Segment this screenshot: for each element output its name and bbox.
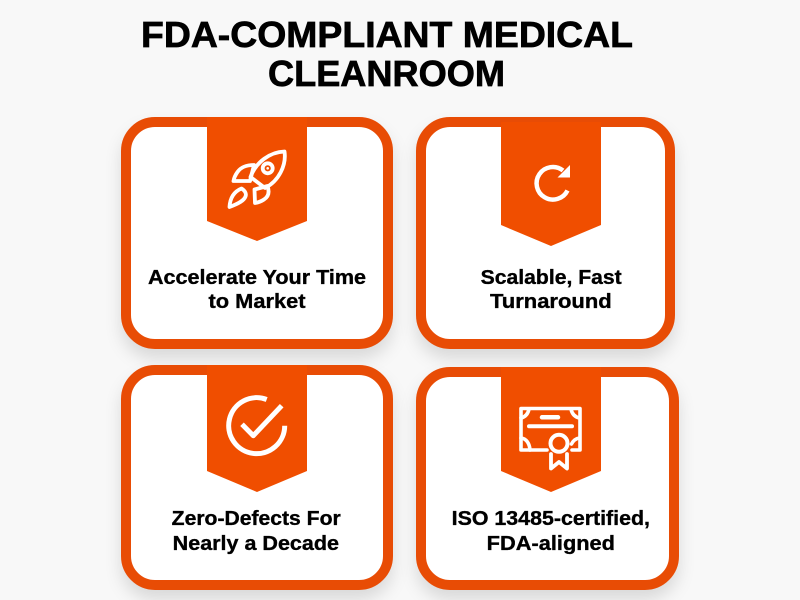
label [148,267,366,313]
ribbon banner [207,117,307,241]
title: FDA-COMPLIANT MEDICAL [141,14,633,55]
label [452,508,650,555]
ribbon banner [501,122,601,246]
panel: iso certified [421,367,674,585]
label: FDA-aligned [487,533,615,555]
label: ISO 13485-certified, [452,508,650,530]
panel: accelerate time to market [126,117,388,344]
label: to Market [208,291,306,313]
icon: refresh arrow [537,165,570,200]
card frame [421,372,674,585]
icon: check in circle [229,398,285,454]
icon: rocket [230,152,285,207]
label: Turnaround [490,291,612,313]
panel: scalable fast turnaround [421,122,670,344]
label: Scalable, Fast [481,267,622,289]
title: CLEANROOM [268,53,505,94]
ribbon banner [207,365,307,492]
label: Nearly a Decade [173,533,339,555]
card frame [126,370,388,585]
card frame [421,122,670,344]
card frame [126,122,388,344]
label: Accelerate Your Time [148,267,366,289]
icon: certificate [521,408,580,468]
ribbon banner [501,367,601,492]
panel: zero defects [126,365,388,585]
label: Zero-Defects For [172,508,341,530]
label [481,267,622,313]
title [141,14,633,94]
label [172,508,341,555]
